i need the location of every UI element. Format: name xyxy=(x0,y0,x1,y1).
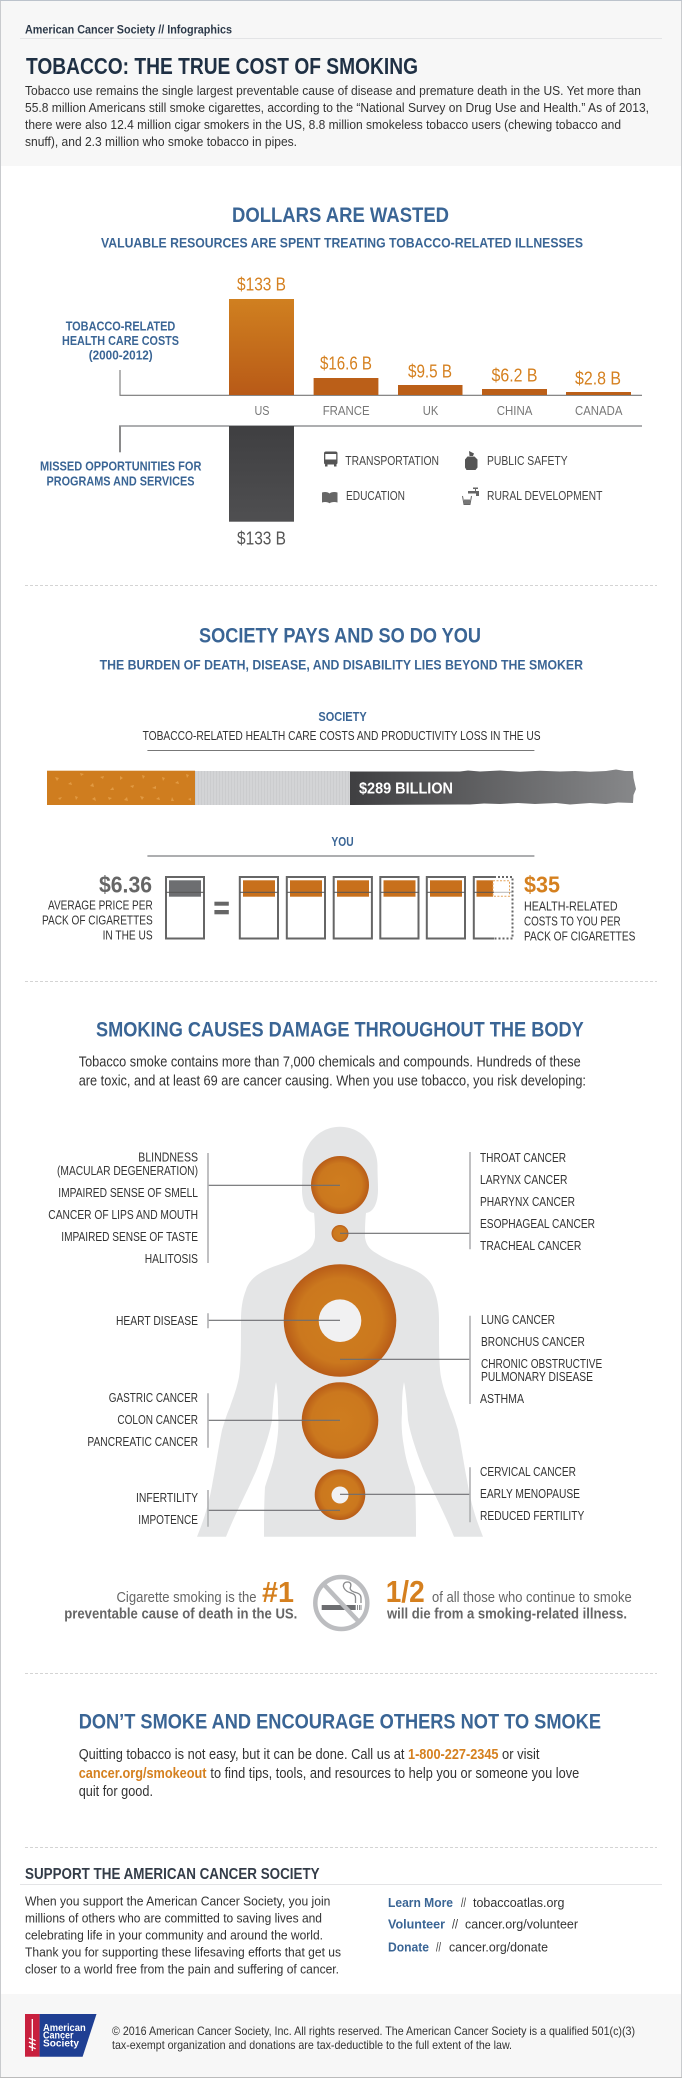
body diagram xyxy=(197,1127,483,1537)
stat: number one cause xyxy=(64,1577,297,1623)
intro text: there were also 12.4 million cigar smokers in the US, 8.8 million smokeless tobacco users (chewing tobacco and xyxy=(25,117,621,132)
logo: American Cancer Society: Society xyxy=(43,2038,79,2049)
bar: China xyxy=(482,365,547,418)
bar: China: $6.2 B xyxy=(492,365,538,385)
bar: France: $16.6 B xyxy=(320,353,372,373)
bar: China: CHINA xyxy=(497,404,533,418)
support text: celebrating life in your community and around the world. xyxy=(25,1928,323,1943)
support links: Learn More xyxy=(388,1895,453,1910)
chart: missed opportunities bar: $133 B xyxy=(237,529,286,549)
legend: programs and services: EDUCATION xyxy=(346,489,405,503)
stat: number one cause: #1 xyxy=(262,1577,294,1609)
labels: lung conditions: LUNG CANCER xyxy=(481,1313,555,1327)
labels: throat conditions: PHARYNX CANCER xyxy=(480,1195,575,1209)
stat: one half xyxy=(386,1574,632,1623)
text: quitting: quit for good. xyxy=(79,1784,153,1800)
labels: throat conditions: LARYNX CANCER xyxy=(480,1173,567,1187)
circle: throat xyxy=(332,1225,348,1242)
heading: smoking causes damage: SMOKING CAUSES DAMAGE THROUGHOUT THE BODY xyxy=(96,1019,584,1042)
label: health care costs: TOBACCO-RELATED xyxy=(66,320,175,334)
chart: cigarette xyxy=(47,770,636,805)
labels: head conditions: IMPAIRED SENSE OF SMELL xyxy=(58,1186,198,1200)
circle: chest xyxy=(284,1264,396,1377)
label: missed opportunities: PROGRAMS AND SERVICES xyxy=(46,475,194,489)
legend: programs and services xyxy=(322,451,603,504)
icon: faucet and glass xyxy=(462,488,479,504)
panel: footer xyxy=(0,1994,682,2078)
labels: digestive conditions: COLON CANCER xyxy=(117,1413,198,1427)
text: quitting: cancer.org/smokeout xyxy=(79,1766,207,1782)
labels: female reproductive: REDUCED FERTILITY xyxy=(480,1509,585,1523)
heading: don't smoke: DON’T SMOKE AND ENCOURAGE OTHERS NOT TO SMOKE xyxy=(79,1710,601,1733)
icon: single cigarette pack xyxy=(166,877,204,938)
intro text: Tobacco use remains the single largest preventable cause of disease and premature death in the US. Yet more than xyxy=(25,83,641,98)
labels: female reproductive: CERVICAL CANCER xyxy=(480,1465,576,1479)
labels: lung conditions: BRONCHUS CANCER xyxy=(481,1335,585,1349)
labels: digestive conditions: PANCREATIC CANCER xyxy=(87,1435,198,1449)
stat: one half: of all those who continue to smoke xyxy=(432,1590,632,1606)
label: health care costs xyxy=(62,320,179,362)
labels: digestive conditions: GASTRIC CANCER xyxy=(109,1391,198,1405)
intro: chemicals xyxy=(79,1055,586,1090)
leader lines xyxy=(208,1185,470,1510)
heading: dollars are wasted: DOLLARS ARE WASTED xyxy=(232,204,449,227)
logo: American Cancer Society xyxy=(25,2014,96,2057)
burnt section xyxy=(350,770,636,805)
icon: no smoking xyxy=(315,1577,367,1629)
legend: programs and services: PUBLIC SAFETY xyxy=(487,454,568,468)
labels: head conditions: IMPAIRED SENSE OF TASTE xyxy=(61,1230,198,1244)
support links: tobaccoatlas.org xyxy=(473,1895,564,1910)
intro text: snuff), and 2.3 million who smoke tobacco in pipes. xyxy=(25,134,297,149)
support links: // xyxy=(436,1940,441,1955)
cigarette filter xyxy=(47,771,195,805)
price per pack: PACK OF CIGARETTES xyxy=(42,913,153,927)
health related costs: COSTS TO YOU PER xyxy=(524,914,621,928)
circle: abdomen xyxy=(302,1382,378,1459)
icon: police xyxy=(465,451,478,470)
circle: pelvis xyxy=(315,1469,365,1520)
brand line: American Cancer Society // Infographics xyxy=(25,22,232,36)
bar: France: FRANCE xyxy=(323,404,370,418)
intro: chemicals: Tobacco smoke contains more than 7,000 chemicals and compounds. Hundreds of these xyxy=(79,1055,581,1071)
intro: chemicals: are toxic, and at least 69 are cancer causing. When you use tobacco, you risk developing: xyxy=(79,1074,586,1090)
labels: lung conditions xyxy=(480,1313,602,1406)
stat: one half: will die from a smoking-related illness. xyxy=(386,1607,627,1623)
labels: head conditions: BLINDNESS xyxy=(138,1151,198,1165)
body silhouette xyxy=(197,1127,483,1537)
cigarette paper xyxy=(195,771,350,805)
bar: US: US xyxy=(254,404,270,418)
text: quitting: to find tips, tools, and resources to help you or someone you love xyxy=(210,1766,579,1782)
text: quitting: 1-800-227-2345 xyxy=(408,1747,498,1763)
support links: Donate xyxy=(388,1940,429,1955)
labels: male reproductive: IMPOTENCE xyxy=(138,1513,198,1527)
labels: throat conditions: ESOPHAGEAL CANCER xyxy=(480,1217,595,1231)
logo: American Cancer Society: Cancer xyxy=(43,2031,74,2042)
support text: When you support the American Cancer Society, you join xyxy=(25,1894,330,1909)
support heading: SUPPORT THE AMERICAN CANCER SOCIETY xyxy=(25,1866,320,1883)
support links: cancer.org/donate xyxy=(449,1940,548,1955)
bar: US: $133 B xyxy=(237,275,286,295)
copyright xyxy=(112,2024,635,2052)
health related costs xyxy=(524,871,635,943)
support links xyxy=(388,1895,579,1955)
legend: programs and services: RURAL DEVELOPMENT xyxy=(487,489,603,503)
health related costs: $35 xyxy=(524,871,560,897)
support links: Volunteer xyxy=(388,1917,445,1932)
bar: France xyxy=(314,353,378,418)
intro text: 55.8 million Americans still smoke cigarettes, according to the “National Survey on Drug Use and Health.” As of 2013, xyxy=(25,100,649,115)
labels: female reproductive xyxy=(480,1465,585,1523)
panel: header xyxy=(0,0,682,166)
support text xyxy=(25,1894,341,1977)
bar: Canada xyxy=(566,368,631,418)
panel: support xyxy=(20,1866,662,1977)
bar: UK: $9.5 B xyxy=(408,361,452,381)
labels: male reproductive: INFERTILITY xyxy=(136,1491,199,1505)
health related costs: PACK OF CIGARETTES xyxy=(524,929,635,943)
price per pack: AVERAGE PRICE PER xyxy=(48,898,153,912)
subheading: burden: THE BURDEN OF DEATH, DISEASE, AND DISABILITY LIES BEYOND THE SMOKER xyxy=(100,656,583,672)
label: missed opportunities xyxy=(40,460,201,489)
bar: Canada: CANADA xyxy=(575,404,623,418)
labels: head conditions: CANCER OF LIPS AND MOUTH xyxy=(48,1208,198,1222)
circle: heart xyxy=(319,1299,361,1342)
labels: digestive conditions xyxy=(87,1391,198,1449)
icon: bus xyxy=(324,452,338,466)
label: society: SOCIETY xyxy=(318,710,367,724)
labels: head conditions: (MACULAR DEGENERATION) xyxy=(57,1164,198,1178)
logo: American Cancer Society: American xyxy=(43,2023,86,2034)
support text: millions of others who are committed to saving lives and xyxy=(25,1911,322,1926)
bar: US xyxy=(229,275,294,418)
circle: head xyxy=(311,1156,369,1214)
labels: head conditions xyxy=(48,1151,198,1266)
label: society xyxy=(143,710,541,751)
price per pack xyxy=(42,871,153,942)
intro text xyxy=(25,83,649,149)
chart: cigarette: $289 BILLION xyxy=(359,780,453,797)
text: quitting: or visit xyxy=(502,1747,540,1763)
label: society: TOBACCO-RELATED HEALTH CARE COSTS AND PRODUCTIVITY LOSS IN THE US xyxy=(143,729,541,743)
title: TOBACCO: THE TRUE COST OF SMOKING xyxy=(26,53,418,79)
support text: closer to a world free from the pain and suffering of cancer. xyxy=(25,1962,339,1977)
heading: society pays: SOCIETY PAYS AND SO DO YOU xyxy=(199,625,481,648)
health related costs: HEALTH-RELATED xyxy=(524,899,618,913)
subheading: valuable resources: VALUABLE RESOURCES ARE SPENT TREATING TOBACCO-RELATED ILLNESSES xyxy=(101,234,583,250)
support links: // xyxy=(461,1895,466,1910)
labels: male reproductive xyxy=(136,1491,199,1527)
labels: female reproductive: EARLY MENOPAUSE xyxy=(480,1487,580,1501)
label: missed opportunities: MISSED OPPORTUNITIES FOR xyxy=(40,460,201,474)
label: you: YOU xyxy=(331,835,354,849)
copyright: tax-exempt organization and donations are tax-deductible to the full extent of the law. xyxy=(112,2038,512,2052)
labels: lung conditions: CHRONIC OBSTRUCTIVE xyxy=(481,1357,602,1371)
bar: Canada: $2.8 B xyxy=(575,368,621,388)
bar: UK xyxy=(398,361,462,418)
stat: number one cause: preventable cause of death in the US. xyxy=(64,1607,297,1623)
brackets xyxy=(208,1152,470,1527)
bar: UK: UK xyxy=(423,404,439,418)
text: quitting xyxy=(79,1747,579,1800)
labels: throat conditions: TRACHEAL CANCER xyxy=(480,1239,581,1253)
bar chart: health care costs xyxy=(120,275,642,418)
price per pack: IN THE US xyxy=(103,928,153,942)
price per pack: $6.36 xyxy=(99,871,152,897)
labels: lung conditions: ASTHMA xyxy=(480,1392,525,1406)
labels: head conditions: HALITOSIS xyxy=(145,1252,198,1266)
labels: throat conditions: THROAT CANCER xyxy=(480,1151,566,1165)
icon: book xyxy=(322,492,338,503)
legend: programs and services: TRANSPORTATION xyxy=(345,454,439,468)
label: health care costs: (2000-2012) xyxy=(89,348,153,362)
support links: cancer.org/volunteer xyxy=(465,1917,579,1932)
icon: row of packs xyxy=(240,877,513,938)
support links: // xyxy=(452,1917,458,1932)
support text: Thank you for supporting these lifesaving efforts that get us xyxy=(25,1945,341,1960)
equals sign xyxy=(214,902,229,914)
stat: one half: 1/2 xyxy=(386,1574,425,1609)
circle: reproductive xyxy=(332,1486,348,1504)
chart: missed opportunities bar xyxy=(120,426,642,549)
stat: number one cause: Cigarette smoking is the xyxy=(116,1590,256,1606)
label: health care costs: HEALTH CARE COSTS xyxy=(62,334,179,348)
label: heart disease: HEART DISEASE xyxy=(116,1314,198,1328)
text: quitting: Quitting tobacco is not easy, but it can be done. Call us at xyxy=(79,1747,404,1763)
labels: lung conditions: PULMONARY DISEASE xyxy=(481,1370,593,1384)
labels: throat conditions xyxy=(480,1151,595,1253)
